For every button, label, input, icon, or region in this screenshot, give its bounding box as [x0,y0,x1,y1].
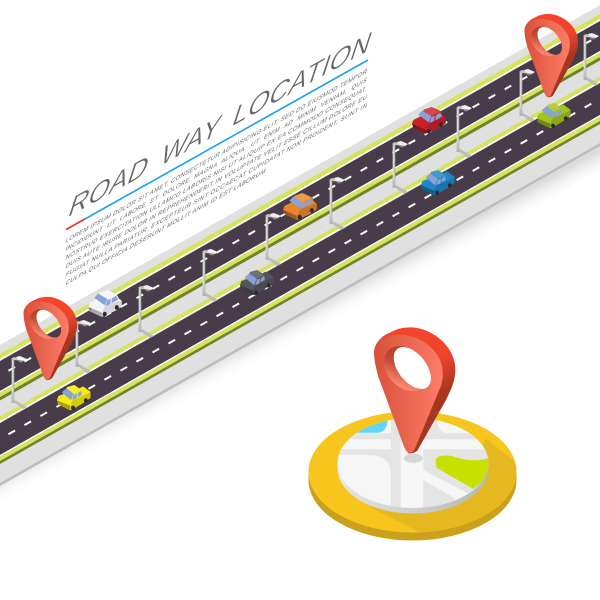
body text: DUIS AUTE IRURE DOLOR IN REPREHENDERIT IN VOLUPTATE VELIT ESSE CILLUM DOLORE EU [64,94,368,270]
location pin: large [374,327,455,453]
yellow disc top [308,412,516,532]
car: grey pickup [240,270,274,295]
platform shadow [0,146,600,510]
yellow disc side [308,411,516,540]
location pin: left [23,297,77,380]
long shadow on disc [370,438,517,532]
lower lane dashes [0,99,600,439]
body text: NOSTRUD EXERCITATION ULLAMCO LABORIS NISI UT ALIQUIP EX EA COMMODO CONSEQUAT. [64,85,368,262]
water [357,420,388,433]
body text: CULPA QUI OFFICIA DESERUNT MOLLIT ANIM ID EST LABORUM. [64,167,268,287]
upper lane dashes [0,35,600,376]
map side [338,424,488,514]
pin shadow [404,454,423,463]
title: ROAD WAY LOCATION [64,24,377,225]
body text: FUGIAT NULLA PARIATUR. EXCEPTEUR SINT OCCAECAT CUPIDATAT NON PROIDENT, SUNT IN [64,102,368,279]
car: red sedan [412,107,446,134]
car: blue pickup [421,170,454,195]
upper road surface [0,21,600,391]
location pin: right [524,14,578,97]
car: green pickup [537,103,570,128]
car: yellow pickup [57,385,90,410]
lower road surface [0,83,600,455]
map roads [337,449,401,510]
highway: lower carriageway [0,76,600,464]
title underline [66,60,368,230]
car: white sedan [88,290,122,317]
body text: LOREM IPSUM DOLOR SIT AMET, CONSECTETUR ADIPISICING ELIT, SED DO EIUSMOD TEMPOR [64,68,368,245]
car: orange sedan [283,193,317,220]
street lamps [12,33,599,409]
platform side [0,140,600,486]
highway: upper carriageway [0,14,600,400]
body text: INCIDIDUNT UT LABORE ET DOLORE MAGNA ALIQUA. UT ENIM AD MINIM VENIAM, QUIS [64,77,368,253]
map disc icon [308,410,517,540]
park [436,455,490,489]
map surface [338,418,488,508]
platform top [0,5,600,483]
